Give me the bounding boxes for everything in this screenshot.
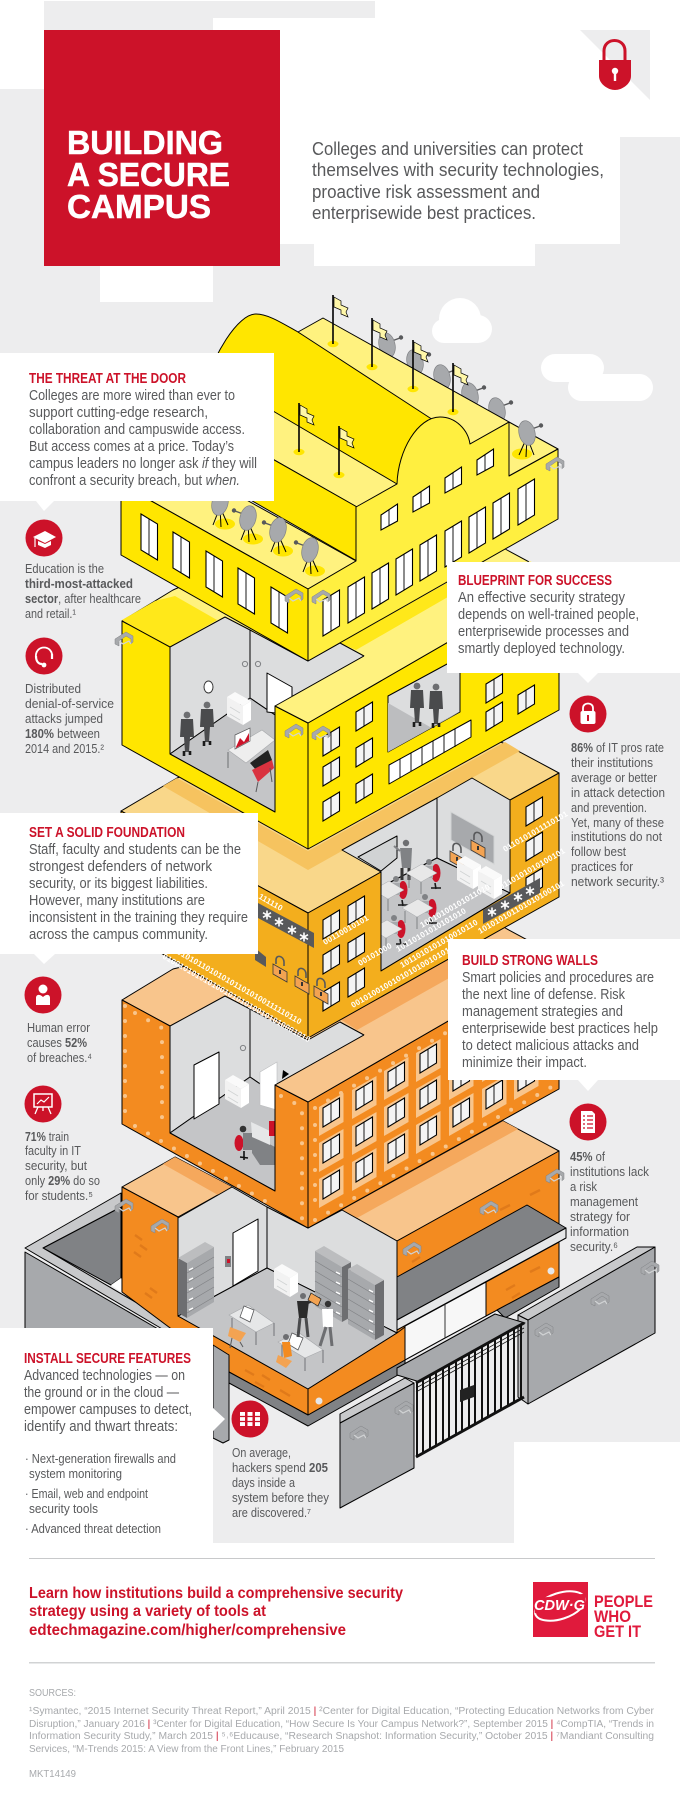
stat: 86 percent [571,741,665,889]
title panel: A SECURE [67,156,230,193]
lower orange wall [486,1242,559,1318]
stat: 45 percent: a risk [570,1180,598,1194]
teacher [394,840,412,880]
callout: set a solid foundation: Staff, faculty and students can be the [29,841,241,858]
logo: CDW-G: CDW·G [534,1597,585,1614]
callout: the threat at the door: Colleges are more wired than ever to [29,387,235,404]
yellow wall faces [122,621,308,849]
stat: 45 percent: strategy for [570,1210,630,1224]
title panel: CAMPUS [67,188,211,225]
stat: third most attacked: Education is the [25,562,104,576]
guards, clock, cabinet, desk [180,661,275,792]
stat: 205 days: days inside a [232,1476,295,1490]
binary code streams: 01010101011010101011010100111110110 [159,938,304,1027]
white lower wall [405,1282,486,1360]
top floor: barrel-vault hall [121,295,558,661]
sources: Disruption,” January 2016 | ³Center for Digital Education, “How Secure Is Your Campus Network?”, September 2015 | ⁴CompTIA, “Trends in [29,1719,654,1730]
sources: MKT14149 [29,1769,76,1780]
sources: SOURCES: [29,1688,76,1699]
title panel: BUILDING [67,124,223,161]
stat: human error: Human error [27,1021,90,1035]
icon: checklist [570,1104,606,1140]
callout: install secure features: · Email, web and endpoint [25,1487,148,1501]
footer rules [29,1558,655,1664]
second-storey window room with guards [388,657,460,752]
stat: 45 percent [570,1150,650,1254]
perimeter gate [340,1247,655,1508]
sources: Services, “M-Trends 2015: A View from the Front Lines,” February 2015 [29,1744,344,1755]
stat: third most attacked: third-most-attacked [25,577,133,591]
right perimeter wall [518,1247,655,1404]
callout: the threat at the door: confront a security breach, but when. [29,472,240,489]
left face [121,484,308,661]
icon: person [24,976,62,1014]
stat: denial of service: 180% between [25,727,100,741]
left windows [141,514,288,633]
security room walls and floor [170,617,364,812]
binary code streams: 10110101010100101 [494,846,567,894]
stat: 205 days [232,1446,330,1520]
logo: CDW-G: WHO [594,1607,631,1626]
callout: set a solid foundation: SET A SOLID FOUNDATION [29,825,185,841]
icon: headset [26,638,62,674]
callout: blueprint for success: BLUEPRINT FOR SUCCESS [458,573,612,589]
stat: human error [27,1021,92,1065]
icon: padlock [599,40,631,90]
callout: install secure features [0,1328,225,1560]
binary code streams: 001010010010101010010101010 [350,938,464,1010]
password bars [255,878,540,967]
stat: third most attacked: sector, after healthcare [25,592,141,606]
callout: set a solid foundation [0,813,258,964]
room walls and floor [178,1187,397,1389]
students [371,856,502,950]
stat: third most attacked: and retail.¹ [25,607,76,621]
callout: set a solid foundation: across the campus community. [29,926,208,943]
stat: 45 percent: management [570,1195,638,1209]
gold wall faces [308,773,559,1038]
sources [29,1688,655,1780]
callout: the threat at the door [0,353,274,511]
sources: Information Security Study,” March 2015 | ⁵˒⁶Educause, “Research Snapshot: Information Security,” October 2015 | ⁷Mandiant Consulting [29,1731,654,1742]
binary code streams: 0110101011110101 [502,809,570,854]
callout: install secure features: security tools [29,1502,98,1516]
gate roof [397,1314,525,1382]
callout: blueprint for success [447,562,680,683]
stat: 71 percent: security, but [25,1159,87,1173]
roof satellite dishes [204,419,543,576]
stat: 86 percent: network security.³ [571,875,664,889]
stat: 205 days: system before they [232,1491,330,1505]
callout: the threat at the door: support cutting-edge research, [29,404,208,421]
right windows [323,449,534,636]
left perimeter wall [340,1378,414,1508]
stat: 86 percent: and prevention. [571,801,647,815]
window grid [319,1021,538,1208]
callout: install secure features: empower campuses to detect, [24,1401,192,1418]
rivets [125,970,555,1220]
stat: 45 percent: security.⁶ [570,1240,618,1254]
staff at desks [228,1293,333,1371]
logo: CDW-G: PEOPLE [594,1592,653,1611]
gold windows [323,797,542,1011]
callout: blueprint for success: smartly deployed technology. [458,640,625,657]
binary code streams: 00101000 [356,941,394,968]
call to action [29,1585,403,1639]
callout: install secure features: · Next-generation firewalls and [25,1452,176,1466]
callout: install secure features: INSTALL SECURE FEATURES [24,1351,191,1367]
callout: build strong walls: the next line of defense. Risk [462,986,625,1003]
stat: 71 percent [25,1130,100,1203]
stat: 71 percent: faculty in IT [25,1144,81,1158]
callout: install secure features: system monitoring [29,1467,122,1481]
stat: 45 percent: information [570,1225,629,1239]
intro text: enterprisewide best practices. [312,203,536,223]
intro text: Colleges and universities can protect [312,139,583,159]
stat: denial of service: Distributed [25,682,81,696]
icon: graduation cap [26,520,62,556]
callout: install secure features: identify and thwart threats: [24,1418,178,1435]
iron gate bars [416,1323,524,1457]
intro text [312,139,604,223]
padlocks [273,956,328,1004]
stat: denial of service [25,682,114,756]
security cameras [115,457,659,1440]
yellow wing windows [323,674,534,821]
callout: set a solid foundation: inconsistent in the training they require [29,909,248,926]
callout: blueprint for success: enterprisewide processes and [458,623,629,640]
stat: denial of service: denial-of-service [25,697,114,711]
stat: 71 percent: for students.⁵ [25,1189,93,1203]
stat: 71 percent: only 29% do so [25,1174,100,1188]
room walls and floor [170,996,364,1191]
binary code streams: 111110 [257,892,285,913]
sources: ¹Symantec, “2015 Internet Security Threat Report,” April 2015 | ²Center for Digital Education, “Protecting Education Networks from Cyber [29,1706,655,1717]
door and server racks [178,1219,384,1340]
call to action: Learn how institutions build a comprehensive security [29,1585,403,1602]
callout: build strong walls [448,939,680,1091]
stat: 86 percent: institutions do not [571,830,662,844]
callout: set a solid foundation: However, many institutions are [29,892,205,909]
intro text: proactive risk assessment and [312,182,540,202]
binary code streams [159,809,570,1044]
flags [294,295,468,478]
floor 2: yellow security wing [122,490,559,849]
binary code streams: 00110010101 [322,913,371,947]
binary code streams: 10110101010101010 [394,906,468,954]
post beside callout [213,1345,229,1443]
stat: 86 percent: in attack detection [571,786,665,800]
callout: build strong walls: management strategies and [462,1003,623,1020]
rear satellite dishes [376,331,513,424]
stat: 205 days: On average, [232,1446,291,1460]
clouds [432,298,653,401]
binary code streams: 101010101101010100101 [476,879,566,936]
door, cabinet, person at desk [194,1045,289,1165]
stat: denial of service: 2014 and 2015.² [25,742,104,756]
call to action: edtechmagazine.com/higher/comprehensive [29,1622,346,1639]
stat: 71 percent: 71% train [25,1130,69,1144]
icon: lock badge [570,696,606,732]
callout: the threat at the door: collaboration and campuswide access. [29,421,245,438]
stat: 45 percent: institutions lack [570,1165,650,1179]
awning [397,1205,566,1330]
stat: denial of service: attacks jumped [25,712,103,726]
classroom walls and floor [342,778,510,971]
stat: human error: causes 52% [27,1036,87,1050]
floor 5: ground level server room [122,1121,566,1426]
binary code streams: 010010101010100101010100101010001010 [161,952,312,1044]
stat: 86 percent: 86% of IT pros rate [571,741,664,755]
callout: install secure features: · Advanced threat detection [25,1522,161,1536]
callout: build strong walls: minimize their impact. [462,1054,587,1071]
intro text: themselves with security technologies, [312,160,604,180]
icon: presentation board [24,1086,62,1122]
stat: third most attacked [25,562,141,621]
callout: the threat at the door: THE THREAT AT THE DOOR [29,371,186,387]
title panel [44,30,280,266]
binary code streams: 1011010101010010110 [398,918,480,970]
stat: 86 percent: Yet, many of these [571,816,664,830]
stat: 45 percent: 45% of [570,1150,605,1164]
callout: the threat at the door: But access comes at a price. Today’s [29,438,234,455]
stat: 205 days: are discovered.⁷ [232,1506,311,1520]
callout: blueprint for success: depends on well-trained people, [458,606,639,623]
callout: install secure features: Advanced technologies — on [24,1367,185,1384]
stat: 86 percent: follow best [571,845,626,859]
callout: the threat at the door: campus leaders no longer ask if they will [29,455,257,472]
logo: CDW-G [531,1582,653,1641]
call to action: strategy using a variety of tools at [29,1603,267,1620]
callout: install secure features: the ground or in the cloud — [24,1384,179,1401]
logo: CDW-G: GET IT [594,1622,642,1641]
brick texture [134,1190,552,1396]
stat: 205 days: hackers spend 205 [232,1461,328,1475]
world map and wall locks [450,812,494,869]
stat: 86 percent: average or better [571,771,657,785]
stat: 86 percent: their institutions [571,756,653,770]
floor 3: gold classroom wing [121,700,570,1044]
floor 4: orange studded wing [122,900,559,1228]
outer security wall left [25,1193,178,1333]
strip window [389,720,471,784]
stat: human error: of breaches.⁴ [27,1051,92,1065]
base band [229,1360,405,1426]
callout: set a solid foundation: strongest defenders of network [29,858,212,875]
callout: build strong walls: BUILD STRONG WALLS [462,953,598,969]
right face with gable [308,417,558,661]
wall faces [122,1000,308,1228]
right orange wall under floor [308,1327,405,1415]
stat: 86 percent: practices for [571,860,633,874]
callout: build strong walls: to detect malicious attacks and [462,1037,639,1054]
callout: set a solid foundation: security, or its biggest liabilities. [29,875,208,892]
binary code streams: 10010100101011010 [418,882,492,930]
icon: server blocks [232,1400,268,1438]
callout: blueprint for success: An effective security strategy [458,589,625,606]
